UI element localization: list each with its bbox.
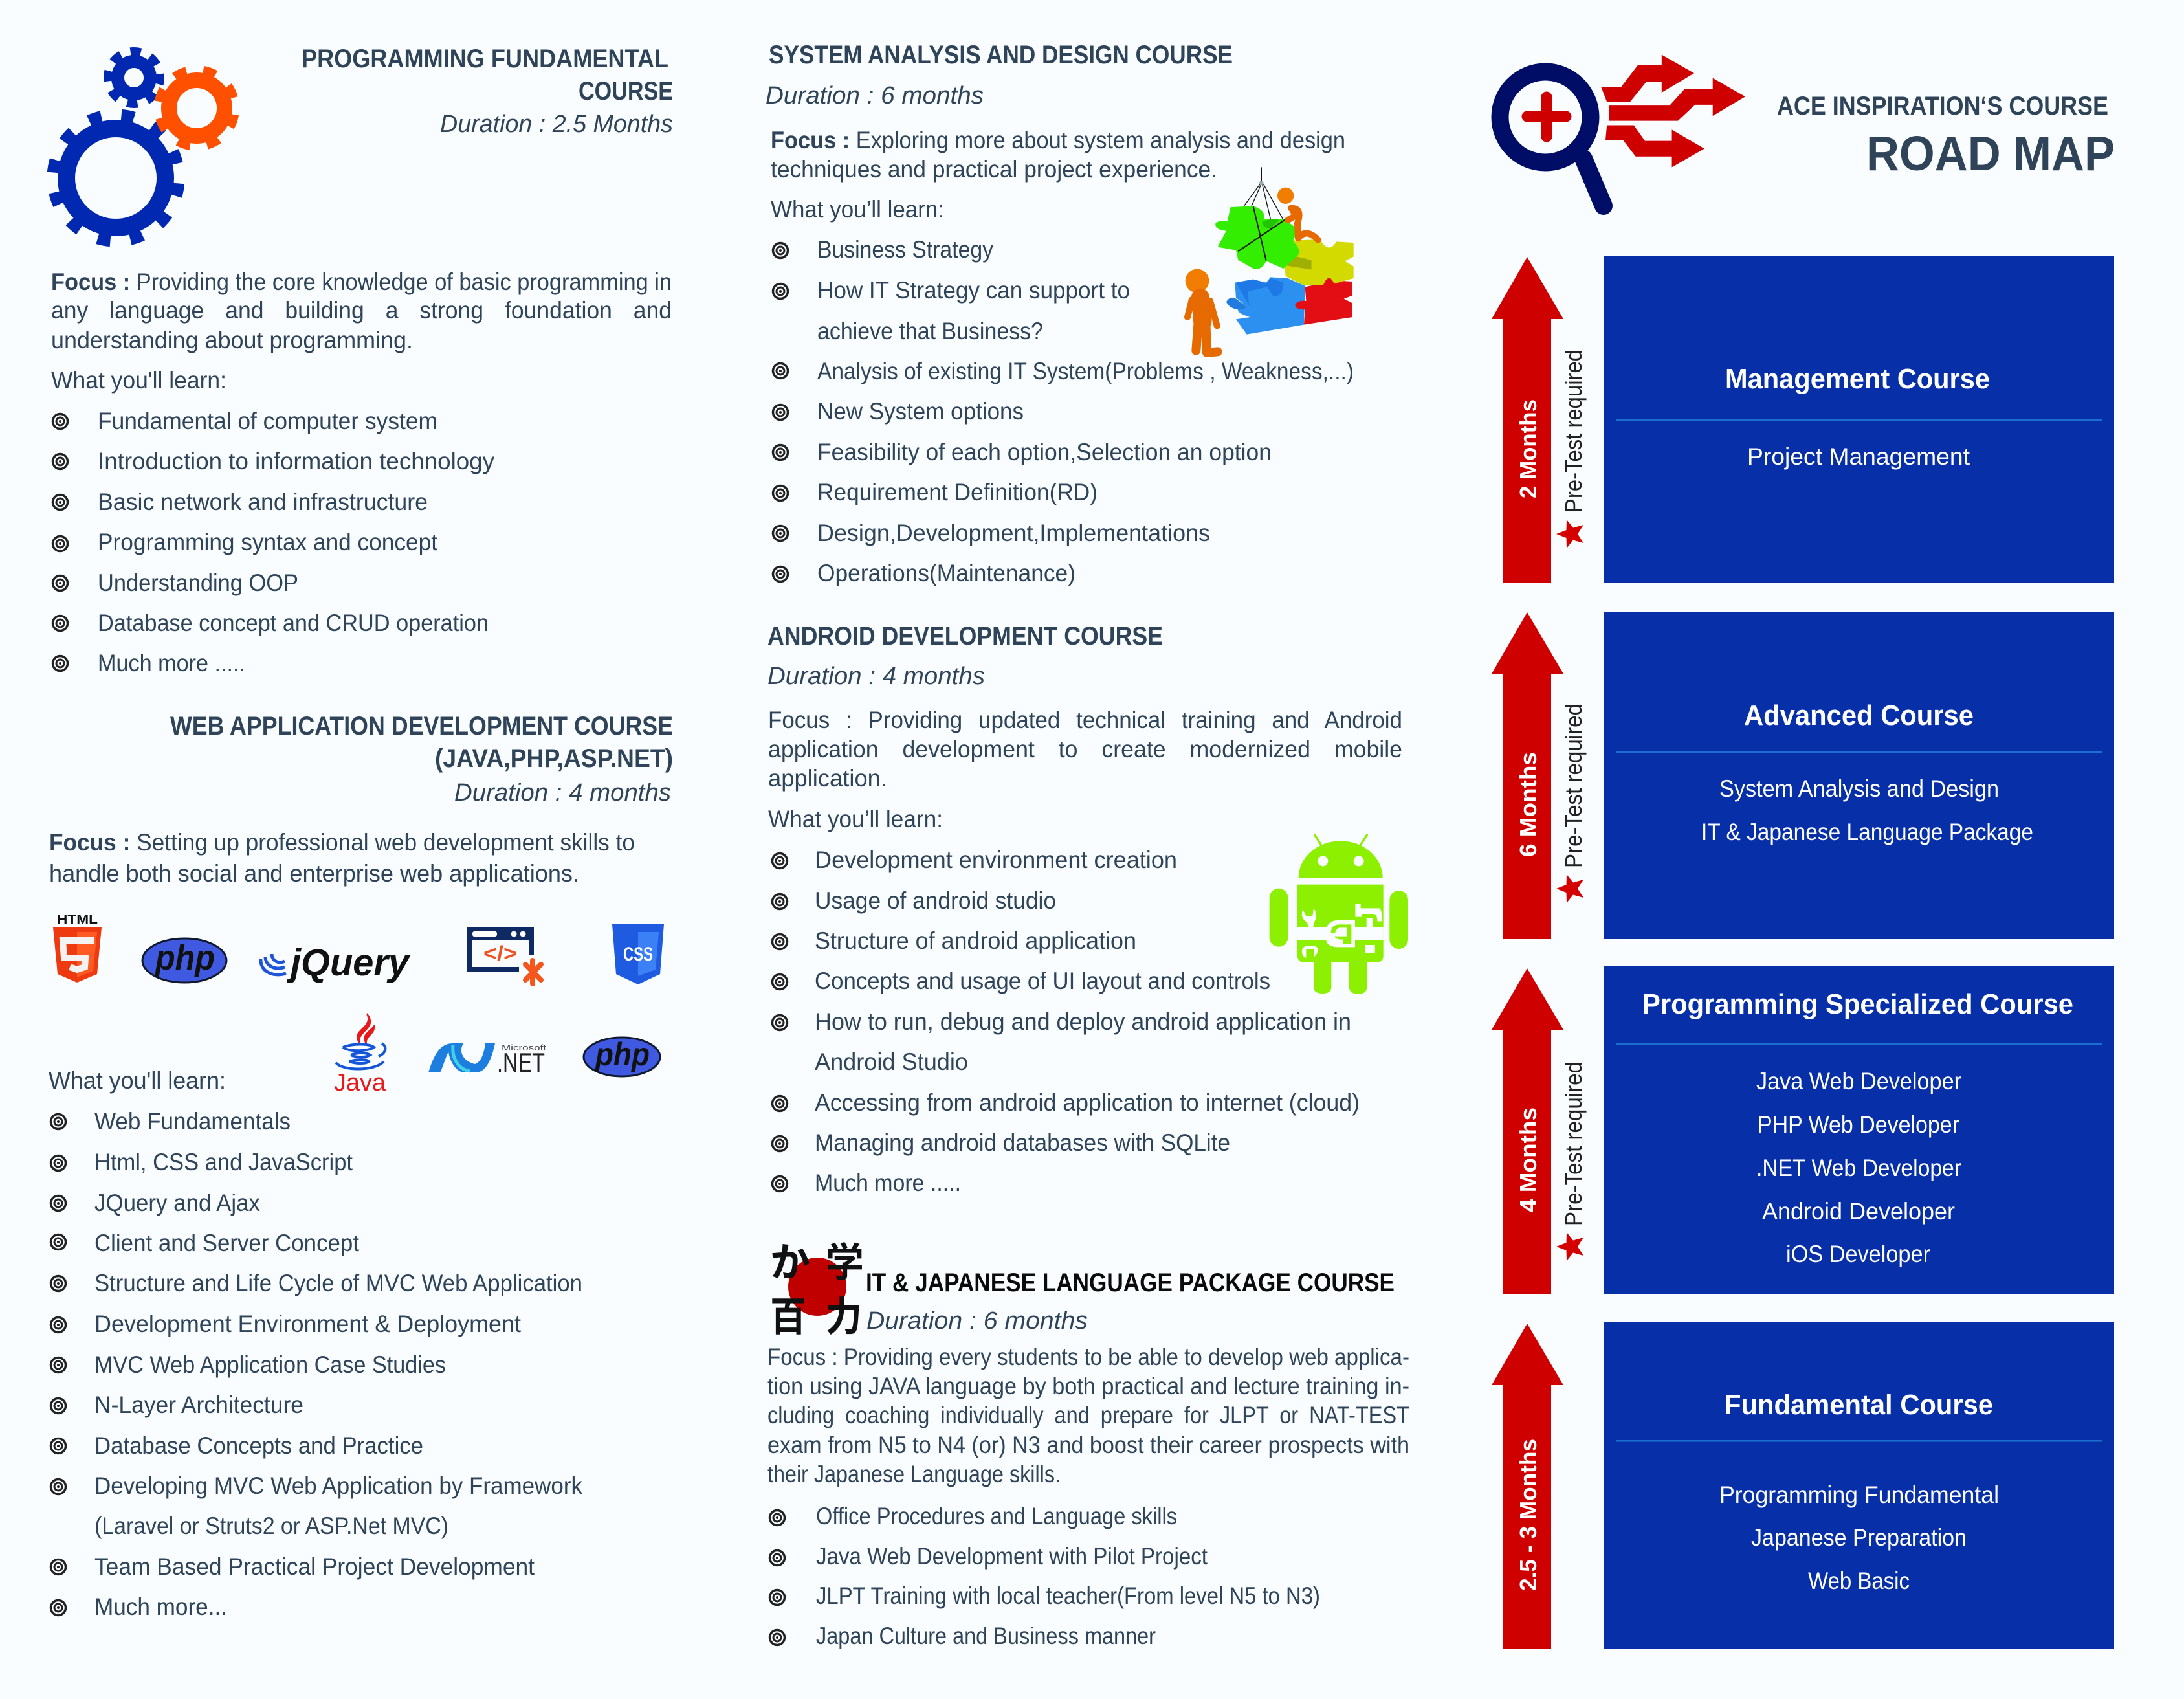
bullet list: Much more ..... (98, 650, 245, 676)
icon: php logo (142, 938, 226, 983)
focus text: cluding coaching individually and prepare for JLPT or NAT-TEST (767, 1402, 1409, 1428)
illustration: puzzle pieces and figures (1186, 167, 1354, 353)
focus text: Focus : Providing every students to be able to develop web applica- (767, 1344, 1409, 1370)
bullet list: Accessing from android application to internet (cloud) (815, 1089, 1360, 1116)
course box: Management Course (1725, 363, 1990, 395)
bullet list: MVC Web Application Case Studies (94, 1351, 446, 1378)
panel: fundamental course (1492, 1322, 2114, 1649)
icon: php logo: php (594, 1036, 650, 1072)
bullet list: JQuery and Ajax (94, 1190, 260, 1216)
course box: Android Developer (1762, 1198, 1955, 1225)
bullet list: Database Concepts and Practice (94, 1432, 423, 1459)
icon: japanese characters with red sun: 力 (826, 1295, 862, 1340)
arrow: 4 months: 4 Months (1515, 1107, 1541, 1212)
panel: programming fundamental course (47, 45, 673, 676)
heading (170, 712, 673, 773)
focus text: tion using JAVA language by both practical and lecture training in- (767, 1373, 1409, 1399)
arrow: 2 months: 2 Months (1515, 399, 1541, 498)
duration: Duration : 2.5 Months (440, 111, 673, 138)
course box: IT & Japanese Language Package (1701, 819, 2033, 845)
what you'll learn label: What you’ll learn: (771, 196, 944, 223)
heading: PROGRAMMING FUNDAMENTAL (302, 45, 668, 73)
icon: magnifier with plus and arrows (1500, 54, 1745, 206)
course box: Japanese Preparation (1751, 1524, 1967, 1551)
bullet list: Team Based Practical Project Development (94, 1553, 535, 1580)
duration: Duration : 4 months (454, 779, 671, 806)
bullet list: Japan Culture and Business manner (816, 1623, 1156, 1649)
arrow: 4 months (1492, 968, 1563, 1294)
bullet list: Android Studio (815, 1049, 968, 1075)
bullet list: Java Web Development with Pilot Project (816, 1543, 1208, 1570)
bullet list: Structure and Life Cycle of MVC Web Application (94, 1270, 582, 1296)
bullet list (770, 1503, 1320, 1649)
panel: advanced course (1492, 612, 2114, 939)
focus text: their Japanese Language skills. (767, 1461, 1061, 1487)
bullet list: Managing android databases with SQLite (815, 1129, 1230, 1156)
icon: css shield: CSS (623, 944, 653, 965)
bullet list: Basic network and infrastructure (98, 489, 428, 515)
bullet list: Web Fundamentals (94, 1108, 291, 1135)
pre-test note (1556, 704, 1587, 903)
course box: .NET Web Developer (1756, 1155, 1961, 1181)
icon: java logo (334, 1014, 386, 1096)
icon: dotnet logo (428, 1043, 547, 1078)
focus text: understanding about programming. (51, 327, 413, 353)
icon: jquery logo: jQuery (286, 942, 411, 984)
panel: programming specialized course (1492, 966, 2114, 1294)
bullet list: Requirement Definition(RD) (817, 479, 1098, 505)
focus text: techniques and practical project experience. (771, 156, 1217, 183)
bullet list (773, 847, 1360, 1196)
bullet list (53, 408, 494, 676)
arrow: 6 months (1492, 612, 1563, 939)
duration: Duration : 6 months (866, 1307, 1088, 1335)
bullet list: Much more... (94, 1594, 227, 1620)
title: ROAD MAP (1866, 126, 2115, 181)
focus text: any language and building a strong foundation and (51, 297, 672, 324)
icon: java logo: Java (334, 1069, 386, 1096)
arrow: 2 months (1492, 257, 1563, 583)
panel: web application development course (49, 712, 673, 1620)
icon: code window with tools (467, 927, 541, 984)
bullet list: Operations(Maintenance) (817, 560, 1075, 586)
bullet list (773, 236, 1354, 586)
bullet list: Design,Development,Implementations (817, 520, 1210, 546)
icon: html5: HTML (57, 913, 98, 927)
focus text (49, 829, 635, 887)
title (1777, 92, 2115, 181)
icon: gears (47, 49, 241, 247)
icon: japanese characters with red sun: 学 (826, 1241, 864, 1285)
title: ACE INSPIRATION‘S COURSE (1777, 92, 2108, 120)
focus text: application development to create modernized mobile (768, 736, 1402, 762)
icon: css shield (612, 924, 664, 984)
what you'll learn label: What you’ll learn: (768, 806, 943, 832)
bullet list: New System options (817, 398, 1024, 425)
course box: iOS Developer (1786, 1241, 1930, 1267)
course box: Java Web Developer (1756, 1068, 1961, 1094)
course box: Project Management (1747, 443, 1970, 470)
bullet list: Developing MVC Web Application by Framework (94, 1472, 582, 1499)
bullet list: N-Layer Architecture (94, 1392, 303, 1418)
heading (302, 45, 673, 105)
course box: Advanced Course (1744, 700, 1974, 731)
heading: IT & JAPANESE LANGUAGE PACKAGE COURSE (866, 1269, 1395, 1297)
icon: html5 (53, 913, 102, 983)
bullet list (50, 1108, 582, 1620)
focus text: handle both social and enterprise web applications. (49, 860, 579, 887)
panel: it and japanese language package course (767, 1241, 1409, 1649)
pre-test note (1556, 350, 1587, 548)
bullet list: Html, CSS and JavaScript (94, 1149, 353, 1175)
bullet list: Client and Server Concept (94, 1230, 360, 1256)
bullet list: achieve that Business? (817, 318, 1043, 344)
arrow: 6 months: 6 Months (1515, 752, 1541, 857)
duration: Duration : 4 months (767, 663, 985, 690)
bullet list: Understanding OOP (98, 570, 298, 596)
focus text (767, 1344, 1409, 1487)
icon: android with tools (1270, 835, 1408, 994)
course box (1604, 966, 2114, 1294)
heading: SYSTEM ANALYSIS AND DESIGN COURSE (769, 41, 1233, 69)
icon: php logo: php (154, 938, 215, 977)
course box: PHP Web Developer (1758, 1111, 1959, 1138)
pre-test note: Pre-Test required (1560, 704, 1587, 868)
course box: Web Basic (1808, 1568, 1910, 1594)
icon: dotnet logo: Microsoft (502, 1043, 547, 1052)
bullet list: Much more ..... (815, 1170, 961, 1196)
focus text: Focus : Providing updated technical training and Android (768, 707, 1402, 733)
bullet list: Office Procedures and Language skills (816, 1503, 1177, 1529)
focus text (768, 707, 1402, 792)
arrow: 2.5 - 3 months: 2.5 - 3 Months (1515, 1439, 1541, 1591)
bullet list: JLPT Training with local teacher(From level N5 to N3) (816, 1582, 1320, 1609)
focus text (51, 269, 672, 353)
bullet list: Structure of android application (815, 927, 1136, 954)
pre-test note: Pre-Test required (1560, 1061, 1587, 1226)
course box: Programming Fundamental (1719, 1482, 1999, 1508)
bullet list: Programming syntax and concept (98, 529, 438, 555)
bullet list: How IT Strategy can support to (817, 277, 1130, 304)
what you'll learn label: What you'll learn: (51, 367, 226, 394)
bullet list: Development environment creation (815, 847, 1177, 873)
bullet list: (Laravel or Struts2 or ASP.Net MVC) (94, 1513, 448, 1539)
what you'll learn label: What you'll learn: (49, 1067, 226, 1094)
bullet list: Database concept and CRUD operation (98, 610, 489, 636)
bullet list: Fundamental of computer system (98, 408, 437, 434)
focus text: Focus : Setting up professional web development skills to (49, 829, 635, 856)
bullet list: How to run, debug and deploy android application in (815, 1008, 1351, 1035)
bullet list: Business Strategy (817, 236, 993, 263)
icon: japanese characters with red sun: 百 (770, 1295, 806, 1340)
focus text: application. (768, 765, 887, 792)
bullet list: Development Environment & Deployment (94, 1311, 522, 1337)
panel: android development course (767, 622, 1408, 1196)
course box: Fundamental Course (1725, 1389, 1993, 1421)
focus text (771, 127, 1345, 183)
bullet list: Concepts and usage of UI layout and controls (815, 968, 1270, 994)
heading: (JAVA,PHP,ASP.NET) (435, 744, 673, 773)
course box: Programming Specialized Course (1642, 988, 2073, 1020)
panel: management course (1492, 256, 2114, 583)
focus text: exam from N5 to N4 (or) N3 and boost their career prospects with (767, 1432, 1409, 1458)
course box (1604, 1322, 2114, 1649)
bullet list: Analysis of existing IT System(Problems , Weakness,...) (817, 358, 1354, 384)
panel: road map header (1500, 54, 2115, 206)
heading: COURSE (579, 77, 673, 105)
heading: WEB APPLICATION DEVELOPMENT COURSE (170, 712, 673, 740)
course box: System Analysis and Design (1719, 775, 1999, 802)
course box (1604, 612, 2114, 939)
focus text: Focus : Providing the core knowledge of basic programming in (51, 269, 672, 295)
icon: dotnet logo: .NET (497, 1047, 545, 1078)
icon: japanese characters with red sun: か (770, 1241, 810, 1285)
heading: ANDROID DEVELOPMENT COURSE (767, 622, 1163, 650)
panel: system analysis and design course (766, 41, 1354, 586)
icon: code window with tools: </> (483, 942, 517, 965)
arrow: 2.5 - 3 months (1492, 1324, 1563, 1649)
bullet list: Introduction to information technology (98, 448, 494, 474)
pre-test note: Pre-Test required (1560, 350, 1587, 513)
duration: Duration : 6 months (766, 82, 984, 109)
course box (1604, 256, 2114, 583)
bullet list: Feasibility of each option,Selection an option (817, 439, 1272, 465)
focus text: Focus : Exploring more about system analysis and design (771, 127, 1345, 153)
bullet list: Usage of android studio (815, 887, 1056, 914)
icon: japanese characters with red sun (770, 1241, 864, 1340)
pre-test note (1556, 1061, 1587, 1261)
